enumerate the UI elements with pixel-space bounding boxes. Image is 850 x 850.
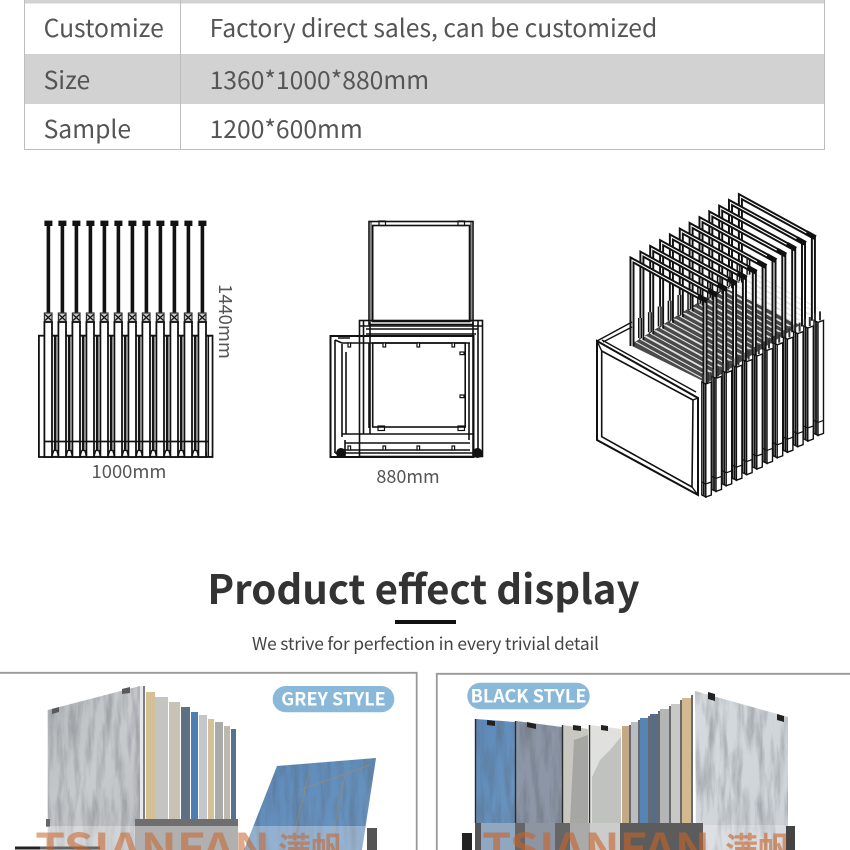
row: customize: Customize <box>44 9 164 45</box>
icon: casters <box>336 448 482 458</box>
row: customize: Factory direct sales, can be customized <box>210 9 657 45</box>
title: Product effect display <box>207 557 640 616</box>
diagram: side view <box>330 221 482 489</box>
specification table <box>24 0 825 150</box>
subtitle: We strive for perfection in every trivial detail <box>252 631 599 656</box>
badge: black style: BLACK STYLE <box>471 682 586 708</box>
panel: black style <box>437 674 850 850</box>
row: size: 1360*1000*880mm <box>210 61 429 97</box>
photo: black rack with slabs <box>462 691 795 850</box>
row: size <box>44 61 429 97</box>
title underline <box>395 620 456 624</box>
diagram: isometric view <box>597 197 824 497</box>
label: 1440mm: 1440mm <box>213 284 239 359</box>
photo: grey rack with slabs <box>15 686 377 850</box>
watermark text <box>35 815 344 850</box>
label: 1000mm: 1000mm <box>92 458 166 484</box>
row: sample: Sample <box>44 110 131 146</box>
watermark band <box>40 826 366 850</box>
panel: grey style <box>0 673 417 850</box>
label: 880mm: 880mm <box>376 463 440 489</box>
diagram: front view <box>39 221 239 484</box>
row: size: Size <box>44 61 90 97</box>
watermark band <box>703 825 786 850</box>
row: sample: 1200*600mm <box>210 110 363 146</box>
watermark text <box>482 815 791 850</box>
row: sample <box>44 110 363 146</box>
badge: grey style: GREY STYLE <box>281 686 386 712</box>
